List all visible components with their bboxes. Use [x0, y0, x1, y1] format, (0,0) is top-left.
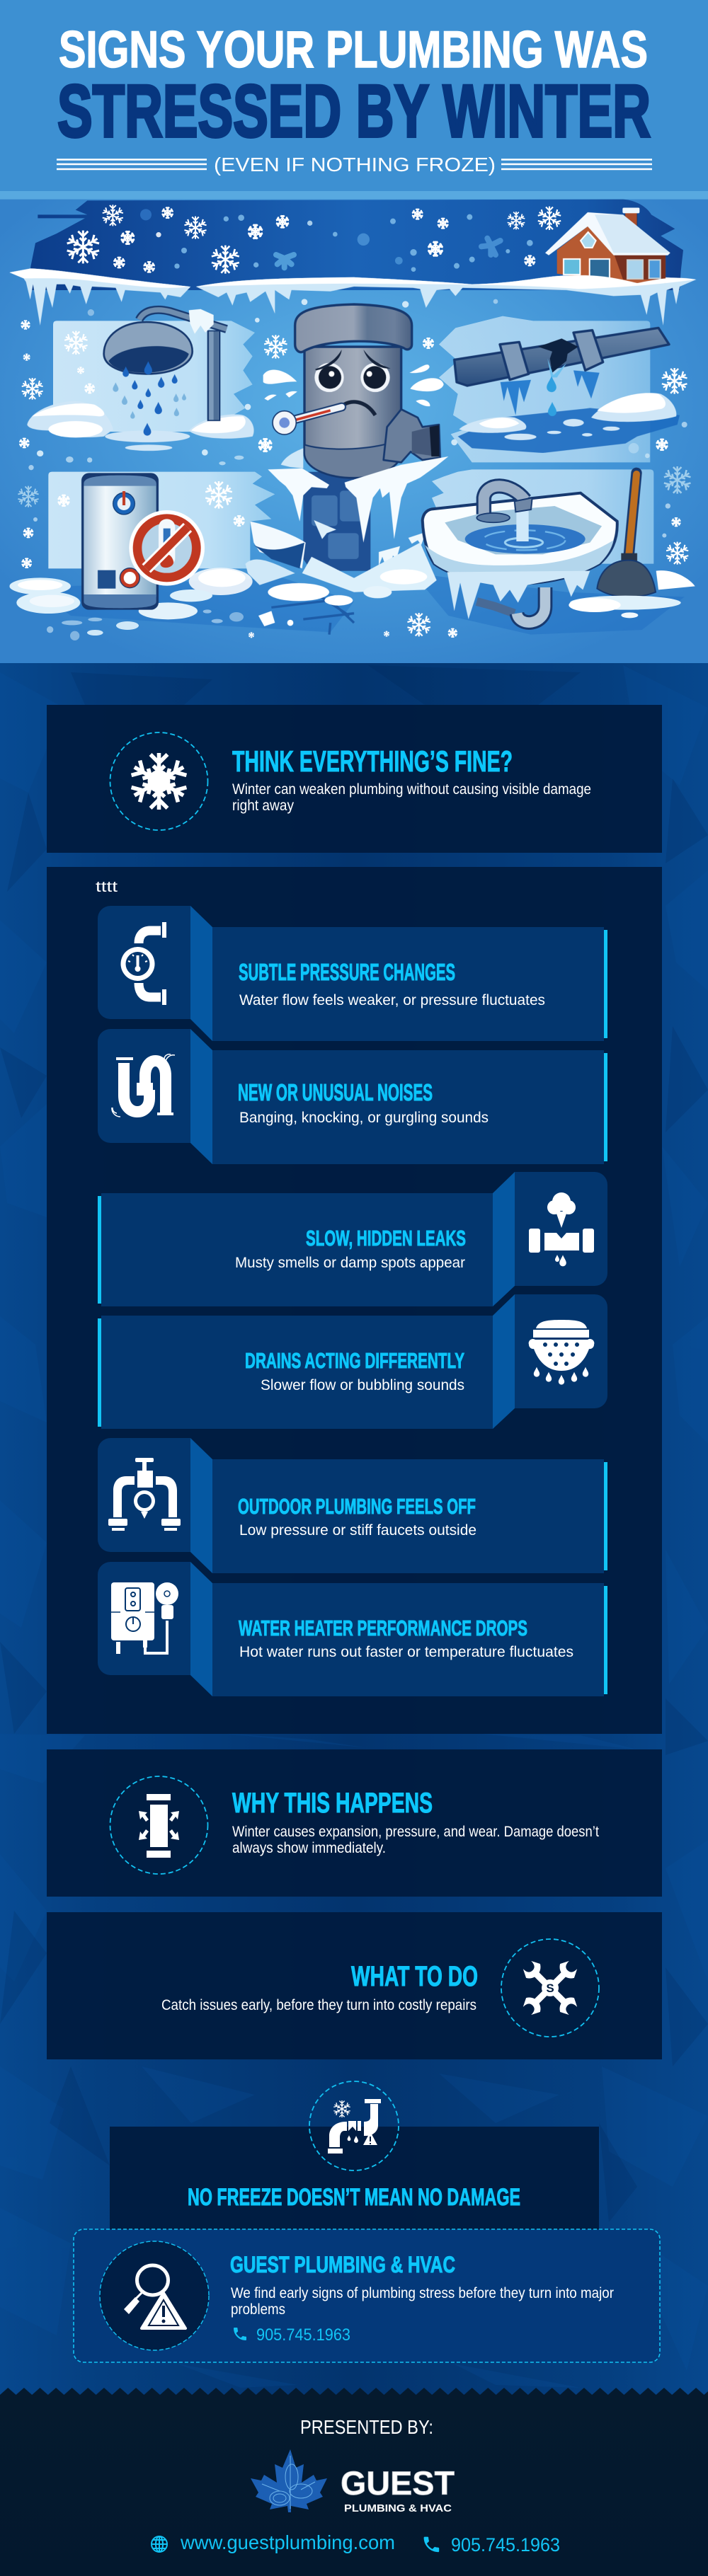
panel: signs list — [47, 867, 662, 1734]
panel: what to do — [47, 1912, 662, 2059]
house — [545, 207, 696, 289]
icon: wrenches and dollar: S — [546, 1982, 554, 1995]
title — [57, 21, 652, 176]
panel: think everything's fine — [47, 705, 662, 853]
footer — [0, 2388, 708, 2576]
cracked ice floor and blocks — [9, 522, 437, 635]
pipe cap — [295, 304, 412, 352]
puddle shadows — [35, 408, 685, 635]
body text: Winter causes expansion, pressure, and wear. Damage doesn’t — [232, 1823, 599, 1840]
small snowflakes — [19, 207, 681, 638]
subtitle with rules — [57, 154, 652, 176]
panel: why this happens — [47, 1749, 662, 1897]
pale scene panels — [48, 316, 653, 568]
stray label: tttt — [96, 879, 118, 895]
shower head with weak drips — [104, 309, 227, 436]
body text: problems — [231, 2301, 285, 2318]
snow ledge with icicles — [9, 268, 696, 326]
icon: magnifier and warning — [100, 2241, 209, 2350]
logo: guest plumbing and hvac: PLUMBING & HVAC — [344, 2502, 452, 2514]
body text: always show immediately. — [232, 1839, 386, 1856]
heading: WHAT TO DO — [351, 1961, 478, 1992]
description: Hot water runs out faster or temperature fluctuates — [239, 1643, 573, 1660]
icon: noisy p-trap — [112, 1054, 175, 1117]
broken pipe with leak — [455, 328, 669, 416]
icon: leaking pipe with smell cloud — [529, 1192, 594, 1266]
icon: outdoor valve with gauge — [108, 1458, 181, 1531]
icon: pressure gauge pipes — [120, 922, 166, 1005]
website: www.guestplumbing.com — [180, 2531, 395, 2553]
sad pipe character — [268, 304, 448, 573]
ice collar — [268, 448, 448, 573]
soft snow dots — [140, 209, 533, 272]
pipe side outlet — [384, 409, 440, 462]
lower frozen pipe — [303, 472, 370, 571]
low-poly background pattern — [0, 665, 708, 2388]
heading: GUEST PLUMBING & HVAC — [230, 2252, 455, 2277]
footer phone: 905.745.1963 — [451, 2534, 560, 2555]
body text: right away — [232, 797, 294, 814]
plunger — [401, 191, 695, 618]
body text: Winter can weaken plumbing without causing visible damage — [232, 781, 591, 798]
panel: no freeze doesn't mean no damage — [110, 2081, 599, 2230]
card: subtle pressure changes — [98, 906, 607, 1041]
card: slow, hidden leaks — [98, 1172, 607, 1306]
logo: guest plumbing and hvac — [251, 2449, 455, 2514]
card: new or unusual noises — [98, 1029, 607, 1164]
frozen sink — [423, 486, 617, 623]
header band — [0, 0, 708, 191]
description: Water flow feels weaker, or pressure fluctuates — [239, 991, 545, 1008]
description: Slower flow or bubbling sounds — [261, 1376, 464, 1393]
top glow strip — [0, 191, 708, 200]
heading: NEW OR UNUSUAL NOISES — [238, 1079, 433, 1105]
icon: wrenches and dollar — [501, 1939, 599, 2037]
body text: We find early signs of plumbing stress before they turn into major — [231, 2284, 614, 2301]
presented by label: PRESENTED BY: — [300, 2416, 433, 2438]
callout: guest plumbing and hvac — [74, 2229, 660, 2362]
night sky strip — [28, 200, 683, 290]
snow mounds — [27, 364, 676, 451]
card: outdoor plumbing feels off — [98, 1438, 607, 1573]
icon: snowflake — [110, 732, 208, 830]
heading: WATER HEATER PERFORMANCE DROPS — [239, 1616, 527, 1640]
description: Banging, knocking, or gurgling sounds — [239, 1109, 489, 1126]
icon: clogged strainer — [529, 1320, 594, 1385]
heading: DRAINS ACTING DIFFERENTLY — [245, 1348, 464, 1373]
icon: expanding pipe — [110, 1776, 208, 1874]
heading: SUBTLE PRESSURE CHANGES — [239, 959, 455, 985]
card: drains acting differently — [98, 1294, 607, 1429]
description: Musty smells or damp spots appear — [235, 1254, 465, 1271]
water heater with no-heat sign — [81, 473, 205, 610]
heading: OUTDOOR PLUMBING FEELS OFF — [238, 1494, 476, 1519]
hero illustration: frozen plumbing scene — [0, 191, 708, 663]
heading: THINK EVERYTHING’S FINE? — [232, 744, 513, 778]
icon: leaking cold pipe — [309, 2081, 399, 2170]
heading: SLOW, HIDDEN LEAKS — [306, 1226, 466, 1250]
body text: Catch issues early, before they turn into costly repairs — [161, 1996, 476, 2013]
icon: tankless heater and shower — [111, 1582, 178, 1654]
phone number: 905.745.1963 — [256, 2325, 350, 2345]
subtitle with rules: (EVEN IF NOTHING FROZE) — [214, 154, 496, 176]
logo: guest plumbing and hvac: GUEST — [341, 2464, 455, 2502]
face — [314, 350, 391, 415]
description: Low pressure or stiff faucets outside — [239, 1522, 476, 1539]
card: water heater performance drops — [98, 1562, 607, 1696]
thermometer — [273, 407, 342, 435]
large snowflakes — [18, 205, 691, 636]
heading: NO FREEZE DOESN’T MEAN NO DAMAGE — [188, 2184, 520, 2211]
heading: WHY THIS HAPPENS — [232, 1788, 433, 1819]
